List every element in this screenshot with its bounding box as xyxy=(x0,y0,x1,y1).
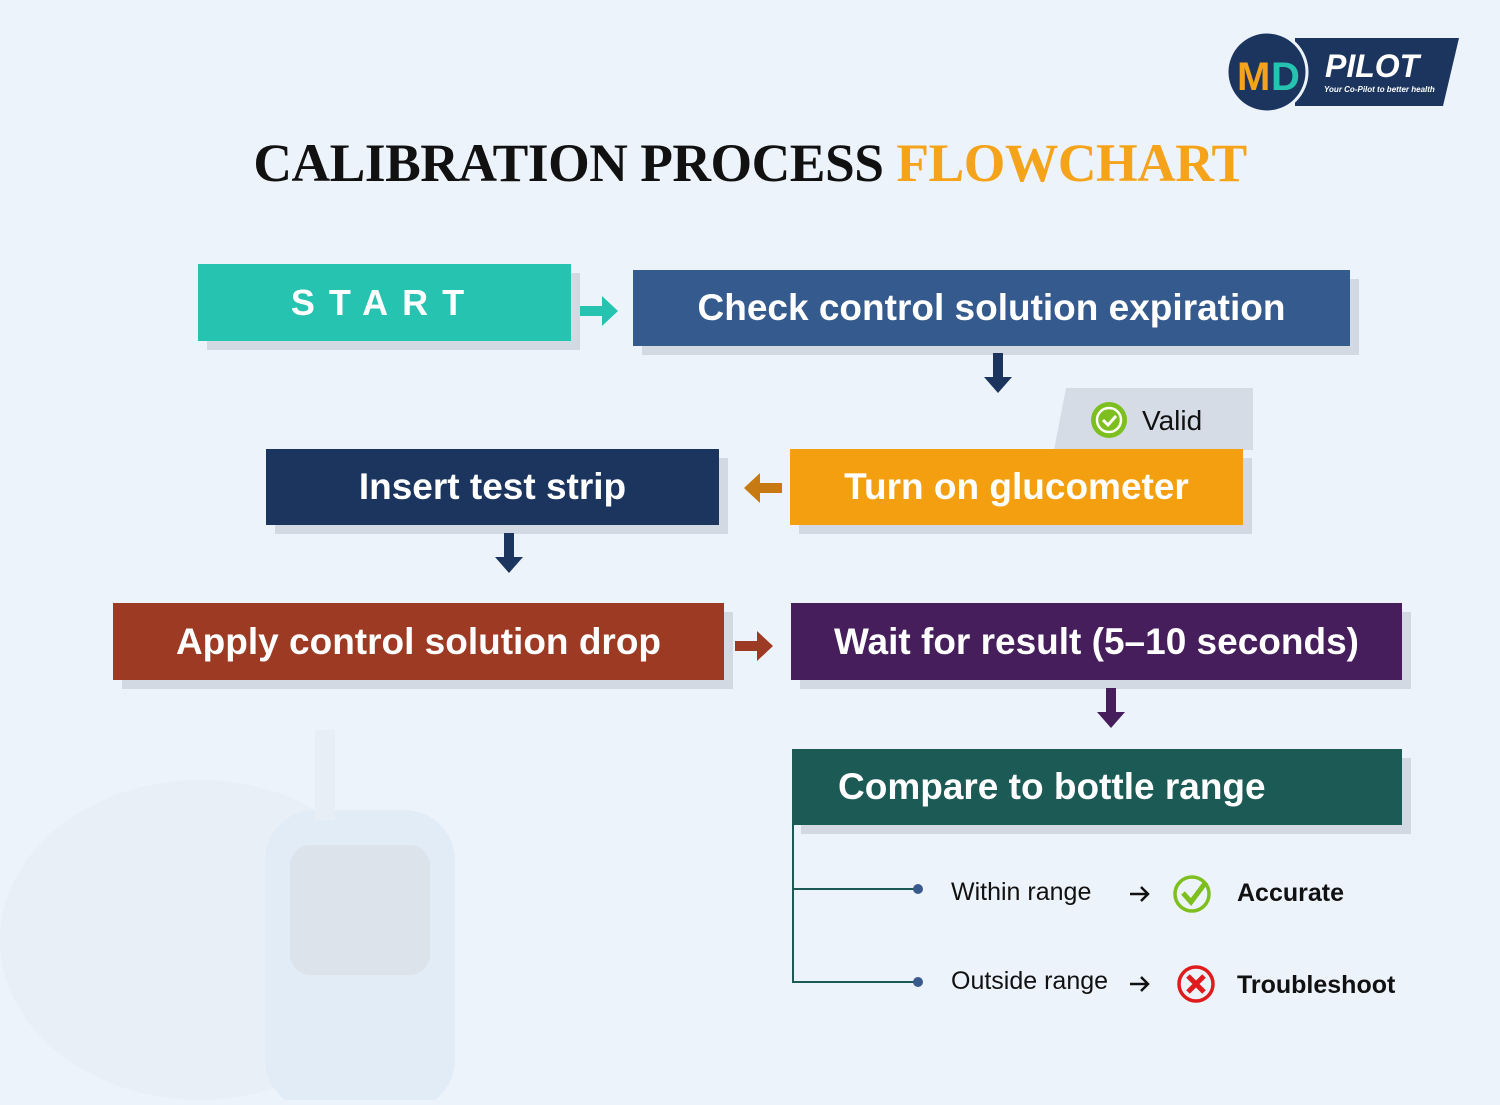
box: wait: Wait for result (5–10 seconds) xyxy=(834,620,1359,662)
box: apply drop: Apply control solution drop xyxy=(176,620,661,662)
arrow: start to check xyxy=(580,296,618,326)
box: turn on glucometer: Turn on glucometer xyxy=(844,466,1189,507)
box: turn on glucometer xyxy=(790,449,1243,525)
badge: valid xyxy=(1054,388,1253,450)
arrow: down 2 xyxy=(495,533,523,573)
arrow: down 3 xyxy=(1097,688,1125,728)
within: Within range xyxy=(951,878,1091,906)
box: start xyxy=(198,264,571,341)
box: compare: Compare to bottle range xyxy=(838,766,1266,807)
arrow: right xyxy=(735,631,773,661)
branch outcomes: Accurate xyxy=(1237,879,1344,907)
logo: Your Co-Pilot to better health xyxy=(1324,85,1435,94)
box: wait xyxy=(791,603,1402,680)
outside: Outside range xyxy=(951,967,1108,995)
box: insert test strip: Insert test strip xyxy=(359,466,626,507)
arrow: down 1 xyxy=(984,353,1012,393)
logo: D xyxy=(1271,55,1300,99)
branch outcomes xyxy=(792,825,1396,1003)
logo: PILOT xyxy=(1325,48,1422,84)
badge: valid: Valid xyxy=(1142,405,1202,436)
box: check expiration: Check control solution expiration xyxy=(698,287,1285,328)
background decoration: faint glucometer xyxy=(265,810,455,1100)
logo: M xyxy=(1237,55,1270,99)
box: apply drop xyxy=(113,603,724,680)
logo xyxy=(1228,34,1459,110)
box: check expiration xyxy=(633,270,1350,346)
box: insert test strip xyxy=(266,449,719,525)
arrow: left xyxy=(744,473,782,503)
box: compare xyxy=(792,749,1402,825)
branch outcomes: Troubleshoot xyxy=(1237,971,1396,999)
box: start: START xyxy=(291,282,478,322)
title: CALIBRATION PROCESS FLOWCHART xyxy=(253,133,1247,193)
